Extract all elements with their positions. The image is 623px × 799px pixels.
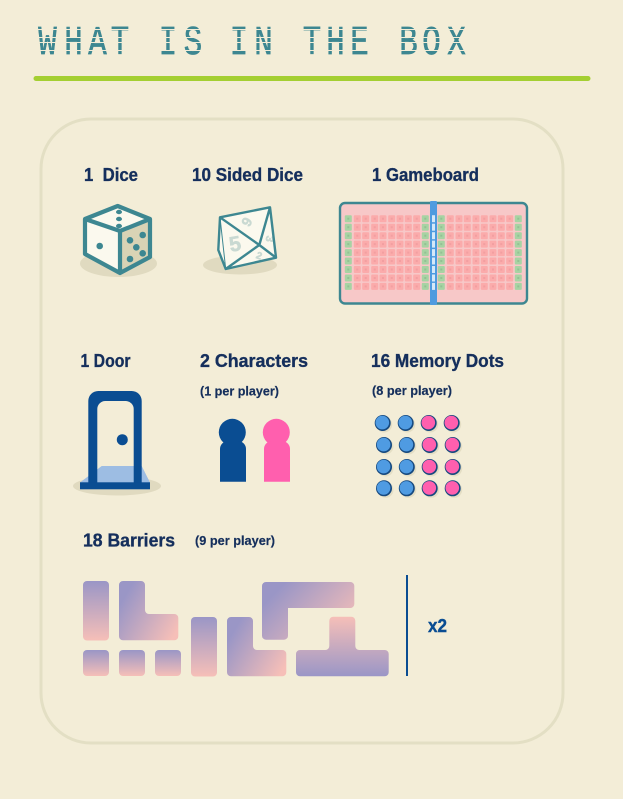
icon: memory dots — [375, 415, 462, 498]
icon: pink character — [263, 419, 290, 482]
icon: six-sided die — [80, 206, 157, 277]
heading: 1 Door: 1 Door — [80, 350, 130, 371]
barrier: small square one — [83, 650, 109, 676]
barrier: tall bar one — [83, 581, 109, 640]
icon: ten-sided die — [203, 207, 277, 274]
chart: gameboard — [340, 201, 527, 305]
text: times two: x2 — [428, 616, 447, 636]
barrier: corner piece — [262, 582, 354, 640]
barrier: T piece — [296, 617, 389, 676]
icon: ten-sided die: 3 — [263, 235, 275, 243]
chart: barrier pieces — [83, 581, 389, 676]
text: 8 per player: (8 per player) — [372, 383, 452, 398]
barrier: L piece two — [227, 617, 286, 676]
icon: ten-sided die: 5 — [227, 232, 243, 257]
icon: blue character — [219, 419, 246, 482]
title: WHAT IS IN THE BOX — [38, 20, 466, 66]
heading: 1 Gameboard: 1 Gameboard — [372, 164, 479, 185]
title underline — [34, 76, 590, 81]
heading: 18 Barriers: 18 Barriers — [83, 530, 175, 550]
barrier: small square three — [155, 650, 181, 676]
barrier: tall bar two — [191, 617, 217, 676]
icon: ten-sided die: 6 — [238, 215, 256, 230]
heading: 10 Sided Dice: 10 Sided Dice — [192, 164, 303, 185]
barrier: small square two — [119, 650, 145, 676]
text: 9 per player: (9 per player) — [195, 533, 275, 548]
divider line — [406, 575, 408, 676]
heading: 2 Characters: 2 Characters — [200, 350, 308, 371]
barrier: L piece one — [119, 581, 178, 640]
text: 1 per player: (1 per player) — [200, 384, 279, 398]
panel: box contents — [41, 119, 563, 743]
heading: 1 Dice: 1 Dice — [84, 164, 138, 185]
icon: door — [73, 391, 161, 496]
icon: ten-sided die: 2 — [254, 250, 264, 263]
heading: 16 Memory Dots: 16 Memory Dots — [371, 350, 504, 371]
